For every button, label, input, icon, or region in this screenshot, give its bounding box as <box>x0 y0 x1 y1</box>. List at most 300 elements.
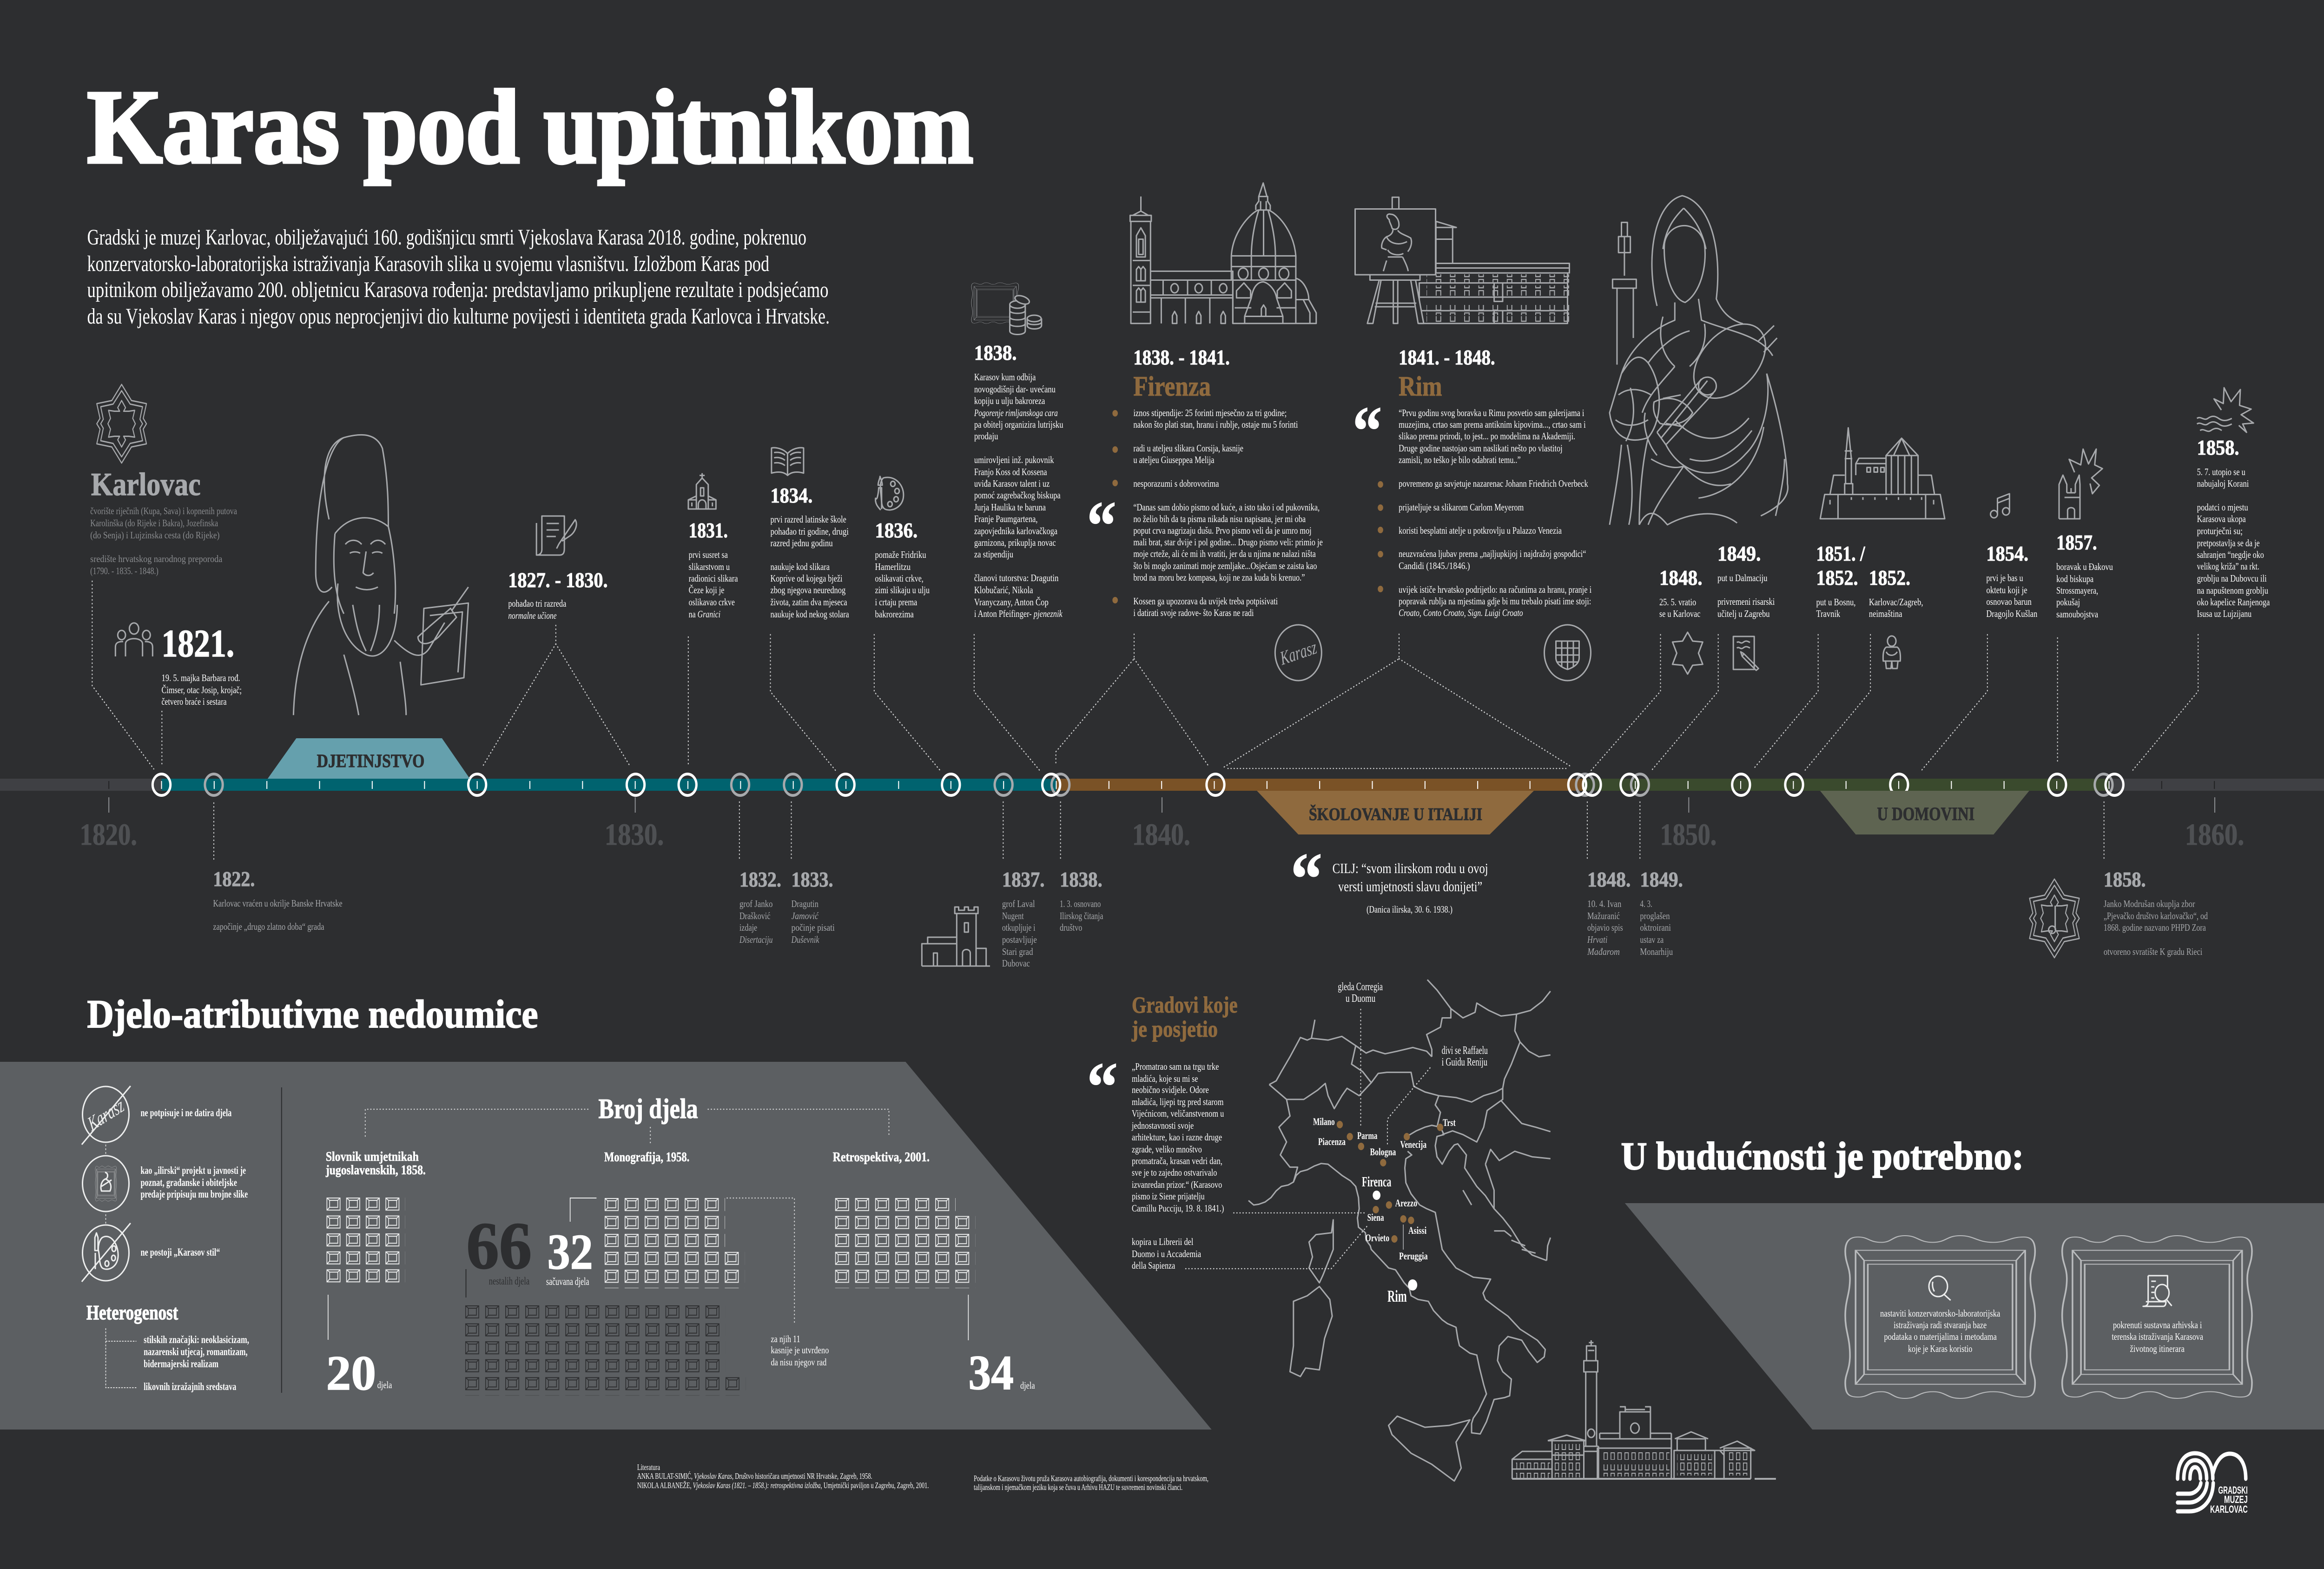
text: Karlovac/Zagreb, <box>1869 597 1923 608</box>
text: Isusa uz Lujzijanu <box>2197 609 2251 619</box>
unit: djela <box>1020 1381 1035 1391</box>
text: normalne učione <box>508 611 557 621</box>
text: Mađarom <box>1587 947 1620 957</box>
year: 1852. <box>1816 566 1858 590</box>
period: u domovini <box>1820 791 2029 834</box>
logo text <box>2210 1485 2248 1515</box>
text <box>771 515 849 620</box>
icon: family <box>115 623 152 656</box>
note: Raffaello <box>1442 1044 1488 1068</box>
text <box>1869 597 1923 619</box>
icon: signature seal <box>1275 625 1321 681</box>
Karlovac block <box>90 384 237 576</box>
icon: crossed palette <box>82 1223 131 1282</box>
text: Vranyczany, Anton Čop <box>974 597 1049 608</box>
text: izdaje <box>739 923 757 933</box>
text: pa obitelj organizira lutrijsku <box>974 420 1063 430</box>
city labels: Siena <box>1367 1212 1384 1223</box>
decade labels: 1850. <box>1660 818 1717 852</box>
note: Raffaello: i Guidu Reniju <box>1442 1055 1487 1068</box>
text: naukuje kod nekog stolara <box>771 609 849 620</box>
city labels: Trst <box>1443 1118 1456 1128</box>
text: nastaviti konzervatorsko-laboratorijska <box>1880 1309 2000 1319</box>
panel divider <box>281 1087 282 1393</box>
text: oslikavati crkve, <box>875 574 924 584</box>
event: 1849 upper <box>1717 542 1775 670</box>
Rim text: Croato, Conto Croato, Sign. Luigi Croato <box>1399 608 1523 618</box>
event: 1858 upper <box>2197 388 2270 619</box>
letter quote: Camillu Pucciju, 19. 8. 1841.) <box>1132 1204 1224 1214</box>
panel: Firenza <box>1087 183 1323 681</box>
Firenza text: moje crteže, ali će mi ih vratiti, jer da u njima ne nalazi ništa <box>1133 549 1316 559</box>
text: radionici slikara <box>689 574 738 584</box>
quote text: CILJ: “svom ilirskom rodu u ovoj <box>1333 861 1488 877</box>
city labels: Peruggia <box>1399 1251 1428 1262</box>
city labels: Bologna <box>1370 1147 1396 1158</box>
heading: Djelo-atributivne nedoumice: Djelo-atributivne nedoumice <box>87 992 538 1037</box>
connector <box>328 1295 329 1340</box>
panel: Rim <box>1353 197 1591 681</box>
year: 1836. <box>875 519 918 543</box>
Karlovac text <box>90 506 237 576</box>
event: 1822 below timeline <box>213 867 343 932</box>
text: oslikavao crkve <box>689 597 735 608</box>
heading: jugoslavenskih, 1858. <box>325 1162 426 1178</box>
event: 1837 below timeline <box>922 868 1045 969</box>
text: podataka o materijalima i metodama <box>1884 1332 1997 1342</box>
sources note: Podatke o Karasovu životu pruža Karasova autobiografija, dokumenti i korespondencija na hrvatskom, <box>974 1474 1208 1483</box>
quote mark: “ <box>1353 392 1382 470</box>
quote text: (Danica ilirska, 30. 6. 1938.) <box>1367 905 1452 915</box>
Firenza text <box>1133 408 1323 618</box>
text <box>1986 573 2038 619</box>
grid: 66 lost works <box>465 1305 746 1395</box>
Rim text: koristi besplatni atelje u potkrovlju u Palazzo Venezia <box>1399 526 1562 536</box>
year: 1833. <box>792 868 833 892</box>
event: 1852 <box>1869 566 1923 669</box>
text: grof Laval <box>1002 899 1035 909</box>
note: Correggio <box>1338 980 1383 1004</box>
text: novogodišnji dar- uvećanu <box>974 384 1056 395</box>
letter quote: „Promatrao sam na trgu trke <box>1132 1062 1219 1072</box>
text: 10. 4. Ivan <box>1587 899 1622 909</box>
Firenza text: nakon što plati stan, hranu i rublje, ostaje mu 5 forinti <box>1133 420 1298 430</box>
text: Jurja Haulika te baruna <box>974 503 1046 513</box>
decade labels: 1860. <box>2185 818 2244 852</box>
event: 1848 upper <box>1659 566 1703 674</box>
event: 1854 <box>1986 494 2038 619</box>
text: samoubojstva <box>2056 609 2099 620</box>
attribution statements: kao „ilirski“ projekt u javnosti je <box>140 1164 246 1176</box>
literature <box>637 1463 929 1490</box>
icon: star fort <box>97 384 146 463</box>
intro text block: da su Vjekoslav Karas i njegov opus neprocjenjivi dio kulturne povijesti i identiteta grada Karlovca i Hrvatske. <box>87 304 830 329</box>
heading: Gradovi koje je posjetio: je posjetio <box>1131 1016 1218 1042</box>
text: privremeni risarski <box>1717 597 1775 607</box>
dotted brackets <box>365 1109 889 1324</box>
text: se u Karlovac <box>1659 609 1700 619</box>
text: životnog itinerara <box>2130 1344 2185 1354</box>
text: bakrorezima <box>875 609 914 620</box>
text: Karasov kum odbija <box>974 372 1036 383</box>
Karlovac text: čvorište riječnih (Kupa, Sava) i kopnenih putova <box>90 506 237 516</box>
text <box>1717 573 1775 619</box>
note: 11 later disproved: za njih 11 <box>771 1334 800 1344</box>
attribution statements: poznat, građanske i obiteljske <box>140 1176 237 1188</box>
text <box>974 372 1063 619</box>
dashed links between icons <box>105 1145 106 1224</box>
city labels: Arezzo <box>1395 1198 1417 1209</box>
logo text: GRADSKI <box>2218 1485 2248 1496</box>
text: Strossmayera, <box>2056 586 2098 596</box>
text <box>875 550 930 620</box>
text: uviđa Karasov talent i uz <box>974 479 1050 489</box>
dashed tree <box>106 1328 138 1388</box>
text: počinje pisati <box>792 923 835 933</box>
number 66: 66 <box>466 1209 532 1283</box>
text: ustav za <box>1640 935 1664 945</box>
text: kopiju u ulju bakroreza <box>974 396 1045 406</box>
column: Monografija 1958 <box>465 1149 829 1395</box>
illustration: woman with mandolin <box>1610 196 1788 525</box>
Firenza text: mali brat, star dvije i pol godine... Drugo pismo veli: primio je <box>1133 537 1323 548</box>
text <box>1659 597 1700 619</box>
frame: conservation research <box>1845 1236 2035 1398</box>
text: naukuje kod slikara <box>771 562 830 572</box>
text: pohađao tri razreda <box>508 599 567 609</box>
decade labels: 1820. <box>80 818 137 852</box>
text <box>213 899 343 932</box>
main city dots <box>1373 1191 1417 1291</box>
Rim text: muzejima, crtao sam prema antiknim kipovima..., crtao sam i <box>1399 420 1586 430</box>
icon: crossed signature: Karasz <box>84 1094 127 1135</box>
text: Drašković <box>739 911 771 921</box>
text: Travnik <box>1816 609 1840 619</box>
letter quote: pismo iz Siene prijatelju <box>1132 1192 1205 1202</box>
text: Klobučarić, Nikola <box>974 585 1033 596</box>
heading: Firenza: Firenza <box>1133 371 1211 402</box>
timeline grey markers <box>205 774 2113 795</box>
icon: Dakovo cathedral and burst <box>2059 449 2102 519</box>
letter quote: mladića, lijepi trg pred starom <box>1132 1097 1224 1107</box>
text: Čeze koji je <box>689 585 724 596</box>
text <box>1816 597 1855 619</box>
event: 1834 <box>771 448 849 620</box>
Karlovac text: Karolinška (do Rijeke i Bakra), Jozefinska <box>90 518 218 529</box>
year: 1834. <box>771 484 812 508</box>
Rim text: “Prvu godinu svog boravka u Rimu posvetio sam galerijama i <box>1399 408 1584 418</box>
year: 1849. <box>1717 542 1761 566</box>
timeline band <box>0 779 2324 813</box>
heading <box>325 1149 426 1178</box>
text: podatci o mjestu <box>2197 503 2248 513</box>
period: djetinjstvo: DJETINJSTVO <box>317 750 424 771</box>
Karlovac text: središte hrvatskog narodnog preporoda <box>90 554 223 564</box>
heading: Karlovac: Karlovac <box>91 466 201 502</box>
text: započinje „drugo zlatno doba“ grada <box>213 922 324 932</box>
text: otvoreno svratište K gradu Rieci <box>2104 947 2202 957</box>
letter quote: neobično svidjele. Odore <box>1132 1085 1209 1095</box>
quote mark: “ <box>1087 487 1116 564</box>
icon: seated person <box>1883 636 1901 669</box>
text: na Granici <box>689 609 720 620</box>
icon: burst and waves <box>2197 388 2253 432</box>
icon: star fort with note <box>2030 879 2079 958</box>
city labels: Asissi <box>1408 1225 1426 1236</box>
year: 1838. - 1841. <box>1133 346 1230 370</box>
text: Dragutin <box>792 899 819 909</box>
heterogeneity list: stilskih značajki: neoklasicizam, <box>144 1333 249 1345</box>
heading: Gradovi koje je posjetio: Gradovi koje <box>1132 992 1238 1018</box>
Firenza text: što bi moglo zanimati moje zemljake...Osjećam se zaista kao <box>1133 561 1317 571</box>
Firenza text: nesporazumi s dobrovorima <box>1133 479 1219 489</box>
heading: Heterogenost: Heterogenost <box>86 1301 178 1324</box>
text: objavio spis <box>1587 923 1623 933</box>
text: 5. 7. utopio se u <box>2197 467 2245 477</box>
Rim text: povremeno ga savjetuje nazarenac Johann Friedrich Overbeck <box>1399 479 1588 489</box>
icon: document and magnifier <box>2143 1276 2172 1306</box>
year: 1849. <box>1640 868 1683 892</box>
heading: Slovnik umjetnikah <box>326 1149 419 1164</box>
note: 11 later disproved: da nisu njegov rad <box>771 1357 827 1368</box>
literature: NIKOLA ALBANEŽE, Vjekoslav Karas (1821. – 1858.): retrospektivna izložba, Umjetnički paviljon u Zagrebu, Zagreb, 2001. <box>637 1481 929 1490</box>
text: zbog njegova neurednog <box>771 585 845 596</box>
year: 1854. <box>1986 542 2028 566</box>
city labels <box>1313 1117 1456 1306</box>
text: prvi susret sa <box>689 550 728 560</box>
text: 1868. godine nazvano PHPD Zora <box>2104 923 2206 933</box>
event: 1838 below timeline <box>1060 868 1103 933</box>
text: postavljuje <box>1002 935 1037 945</box>
event: 1838 <box>971 283 1063 619</box>
year: 1858. <box>2197 436 2239 460</box>
text: oktetu koji je <box>1986 585 2027 596</box>
heterogeneity list: nazarenski utjecaj, romantizam, <box>144 1345 248 1357</box>
icon: magnifier <box>1929 1276 1951 1300</box>
number 34: 34 <box>968 1346 1014 1400</box>
portrait of Karas <box>293 435 469 715</box>
text: učitelj u Zagrebu <box>1717 609 1770 619</box>
year: 1837. <box>1002 868 1045 892</box>
Karlovac text: (1790. - 1835. - 1848.) <box>90 566 158 576</box>
letter quote: promatrača, krasan vedri dan, <box>1132 1156 1222 1166</box>
Perugia leader <box>1403 1225 1404 1250</box>
text: Stari grad <box>1002 947 1033 957</box>
text: pokrenuti sustavna arhivska i <box>2113 1320 2202 1331</box>
text: grof Janko <box>739 899 773 909</box>
letter quote: zgrade, veliko mnoštvo <box>1132 1145 1202 1155</box>
text <box>162 673 242 707</box>
year: 1838. <box>974 341 1017 365</box>
text: oko kapelice Ranjenoga <box>2197 597 2270 608</box>
intro text block: konzervatorsko-laboratorijska istraživanja Karasovih slika u svojemu vlasništvu. Izložbom Karas pod <box>87 252 769 276</box>
heterogeneity list: likovnih izražajnih sredstava <box>144 1380 237 1392</box>
icon: easel and palace <box>1355 197 1569 324</box>
panel: attribution doubts <box>0 1062 1212 1430</box>
Rim text: neuzvraćena ljubav prema „najljupkijoj i najdražoj gospođici“ <box>1399 549 1586 559</box>
ornate frame <box>2062 1236 2252 1398</box>
year: 1841. - 1848. <box>1399 346 1495 370</box>
logo text: KARLOVAC <box>2210 1504 2248 1515</box>
text: života, zatim dva mjeseca <box>771 597 847 608</box>
icon: framed painting <box>83 1156 129 1212</box>
text <box>508 599 567 621</box>
dotted connectors above timeline <box>92 581 2198 772</box>
text: Janko Modrušan okuplja zbor <box>2104 899 2195 909</box>
connector <box>968 1295 969 1340</box>
text <box>791 899 835 945</box>
map annotations <box>1186 980 1488 1306</box>
text: zapovjednika karlovačkoga <box>974 526 1057 536</box>
heading: Rim: Rim <box>1399 371 1442 402</box>
text: kod biskupa <box>2056 574 2094 584</box>
text: prvi je bas u <box>1986 573 2023 583</box>
year 1821: 1821. <box>162 622 234 665</box>
dotted leader lines <box>1186 1009 1430 1269</box>
text: put u Dalmaciju <box>1717 573 1768 583</box>
city labels: Rim <box>1387 1287 1407 1306</box>
year: 1838. <box>1060 868 1103 892</box>
text: 19. 5. majka Barbara rođ. <box>162 673 240 683</box>
frame: archival research <box>2062 1236 2252 1398</box>
text <box>1587 899 1623 957</box>
text: Pogorenje rimljanskoga cara <box>974 408 1058 418</box>
text: proglašen <box>1640 911 1670 921</box>
text: zimi slikaju u ulju <box>875 585 930 596</box>
heading: Monografija, 1958. <box>604 1149 689 1165</box>
text <box>2056 562 2113 620</box>
letter quote: jednostavnosti svoje <box>1131 1121 1194 1131</box>
event: 1831 <box>688 473 738 620</box>
Rim text: slikao prema prirodi, to jest... po modelima na Akademiji. <box>1399 431 1575 442</box>
Firenza text: i datirati svoje radove- što Karas ne radi <box>1133 608 1254 618</box>
attribution statements <box>140 1106 248 1258</box>
label: preserved works: sačuvana djela <box>546 1275 589 1287</box>
text: Dragojlo Kušlan <box>1986 609 2038 619</box>
text <box>689 550 738 620</box>
quote mark: “ <box>1087 1048 1118 1125</box>
period: u domovini: U DOMOVINI <box>1877 803 1974 824</box>
icon: Travnik fortress <box>1820 428 1945 519</box>
text: Hrvati <box>1587 935 1607 945</box>
attribution statements: ne potpisuje i ne datira djela <box>140 1106 232 1119</box>
event: 1821 <box>115 622 242 707</box>
Firenza text: u ateljeu Giuseppea Melija <box>1133 455 1215 465</box>
text: 4. 3. <box>1640 899 1652 909</box>
year: 1831. <box>689 519 728 543</box>
event: 1827-1830 <box>508 516 608 621</box>
text: velikog križa” na rkt. <box>2197 562 2259 572</box>
heterogeneity list: bidermajerski realizam <box>144 1357 218 1370</box>
text: Karlovac vraćen u okrilje Banske Hrvatske <box>213 899 343 909</box>
icon: open book <box>772 448 804 476</box>
Rim text: uvijek ističe hrvatsko podrijetlo: na računima za hranu, pranje i <box>1399 585 1591 595</box>
text: boravak u Đakovu <box>2056 562 2113 572</box>
text: Nugent <box>1002 911 1024 921</box>
letter quote: Duomo i u Accademia <box>1132 1249 1202 1259</box>
year: 1832. <box>739 868 781 892</box>
year: 1822. <box>213 867 255 891</box>
letter quote: kopira u Librerii del <box>1132 1237 1194 1247</box>
icon: palette <box>876 477 904 510</box>
text: Koprive od kojega bježi <box>771 574 843 584</box>
heading: Retrospektiva, 2001. <box>833 1149 930 1165</box>
text: pretpostavlja se da je <box>2197 538 2260 549</box>
attribution statements: ne postoji „Karasov stil“ <box>140 1246 220 1258</box>
bullets <box>1112 410 1118 603</box>
panel: future needs <box>1625 1203 2324 1430</box>
text: članovi tutorstva: Dragutin <box>974 573 1059 583</box>
note: Correggio: u Duomu <box>1346 992 1375 1004</box>
Rim text: Candidi (1845./1846.) <box>1399 561 1470 571</box>
text: Franjo Koss od Kossena <box>974 467 1047 477</box>
text: istraživanja radi stvaranja baze <box>1894 1320 1987 1331</box>
note: 11 later disproved: kasnije je utvrđeno <box>771 1345 829 1356</box>
logo: Gradski muzej Karlovac <box>2178 1453 2248 1515</box>
text: Duševnik <box>791 935 819 945</box>
text: Mažuranić <box>1587 911 1620 921</box>
quote text <box>1333 861 1488 915</box>
heterogeneity list <box>144 1333 249 1392</box>
period: skolovanje u Italiji <box>1257 791 1534 834</box>
column: Slovnik 1858 <box>325 1149 426 1401</box>
text: Disertaciju <box>739 935 773 945</box>
quote text: versti umjetnosti slavu donijeti” <box>1338 879 1482 895</box>
text <box>1060 899 1103 933</box>
period: djetinjstvo <box>268 738 470 779</box>
year: 1848. <box>1659 566 1703 590</box>
icon: small star fort <box>1672 632 1703 674</box>
column: Retrospektiva 2001 <box>833 1149 1035 1400</box>
year: 1848. <box>1587 868 1631 892</box>
event: 1851/1852 Bosnia <box>1816 428 1945 619</box>
year: 1857. <box>2056 531 2097 555</box>
text: četvero braće i sestara <box>162 697 227 707</box>
label: lost works: nestalih djela <box>489 1275 530 1287</box>
decade labels <box>80 818 2244 852</box>
city labels: Venecija <box>1400 1139 1426 1150</box>
heading: Broj djela: Broj djela <box>599 1093 698 1124</box>
year: 1851. / <box>1816 542 1866 566</box>
year: 1827. - 1830. <box>508 569 608 592</box>
year: 1858. <box>2104 868 2146 892</box>
icon: book and quill <box>536 516 576 555</box>
period: skolovanje u Italiji: ŠKOLOVANJE U ITALIJI <box>1309 804 1482 824</box>
grid: 32 preserved works <box>605 1198 745 1288</box>
literature: Literatura <box>637 1463 660 1472</box>
text: Hamerlitzu <box>875 562 911 572</box>
city labels: Piacenza <box>1318 1137 1346 1147</box>
icon: crossed signature <box>82 1086 131 1145</box>
text: razred jednu godinu <box>771 538 833 549</box>
text: Čimser, otac Josip, krojač; <box>162 685 242 695</box>
illustration: Siena skyline <box>1512 1340 1776 1479</box>
sources note <box>974 1474 1208 1492</box>
text <box>2104 899 2208 957</box>
text: koje je Karas koristio <box>1908 1344 1972 1354</box>
text: i Anton Pfeifinger- pjeneznik <box>974 609 1063 619</box>
heading: Gradovi koje je posjetio <box>1131 992 1238 1042</box>
number 20: 20 <box>326 1346 376 1401</box>
city dots <box>1337 1121 1443 1243</box>
sources note: talijanskom i njemačkom jeziku koja se čuva u Arhivu HAZU te suvremeni novinski članci. <box>974 1483 1182 1492</box>
text <box>2197 467 2270 619</box>
text: umirovljeni inž. pukovnik <box>974 455 1054 465</box>
Firenza text: “Danas sam dobio pismo od kuće, a isto tako i od pukovnika, <box>1133 503 1320 513</box>
year: 1852. <box>1869 566 1910 590</box>
text <box>2112 1320 2203 1354</box>
text: put u Bosnu, <box>1816 597 1856 608</box>
